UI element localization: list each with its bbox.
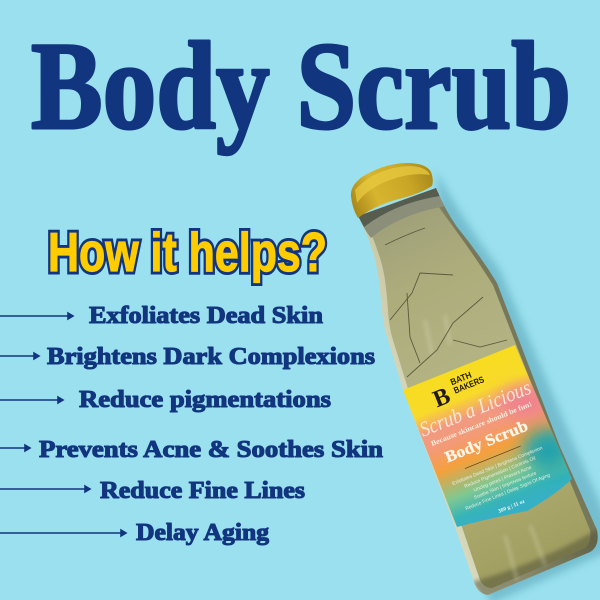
powder [368,195,590,588]
product script name: Scrub a Licious [416,375,534,442]
arrow 1 [0,313,73,319]
arrow 6 [0,530,126,536]
label text [420,372,550,513]
arrow 3 [0,397,63,403]
label text: Unclog pores | Prevent Acne [473,465,533,494]
label colour blobs [524,428,572,472]
base shading [474,530,598,595]
heading: How it helps: How it helps? [48,221,327,283]
tagline: Because skincare should be fun! [430,399,533,448]
benefit 2: Brightens Dark Complexions [47,344,375,370]
bottle shadow [436,172,600,600]
brand mark: B [430,383,454,413]
powder cracks [385,228,507,377]
arrow 2 [0,353,39,359]
highlight streaks [425,315,545,580]
weight: 300 g | 11 oz [498,499,526,515]
benefit 4: Prevents Acne & Soothes Skin [39,437,383,463]
label [403,345,572,527]
bottle [351,163,600,600]
label background [403,345,572,527]
brand name: BATH [449,370,473,387]
divider [465,446,521,469]
arrow 4 [0,445,30,451]
benefit 5: Reduce Fine Lines [100,478,305,504]
gold cap [351,163,433,218]
benefits small text: Exfoliates Dead Skin | Brightens Complexion [451,445,544,487]
benefit list [0,303,383,546]
arrow 5 [0,486,90,492]
label text: Soothe Skin | Improves texture [473,470,538,501]
label text: Reduce Fine Lines | Delay Signs Of Aging [465,472,551,512]
benefit 1: Exfoliates Dead Skin [89,303,323,329]
heading: How it helps: How it helps? [48,221,327,283]
label text: Reduce Pigmentation | Controls Oil [464,456,537,490]
benefit 3: Reduce pigmentations [79,387,331,413]
label text: BAKERS [452,374,486,396]
benefit 6: Delay Aging [136,520,269,546]
product name: Body Scrub [443,418,531,466]
neck glass [358,188,446,238]
glass body [358,188,598,595]
